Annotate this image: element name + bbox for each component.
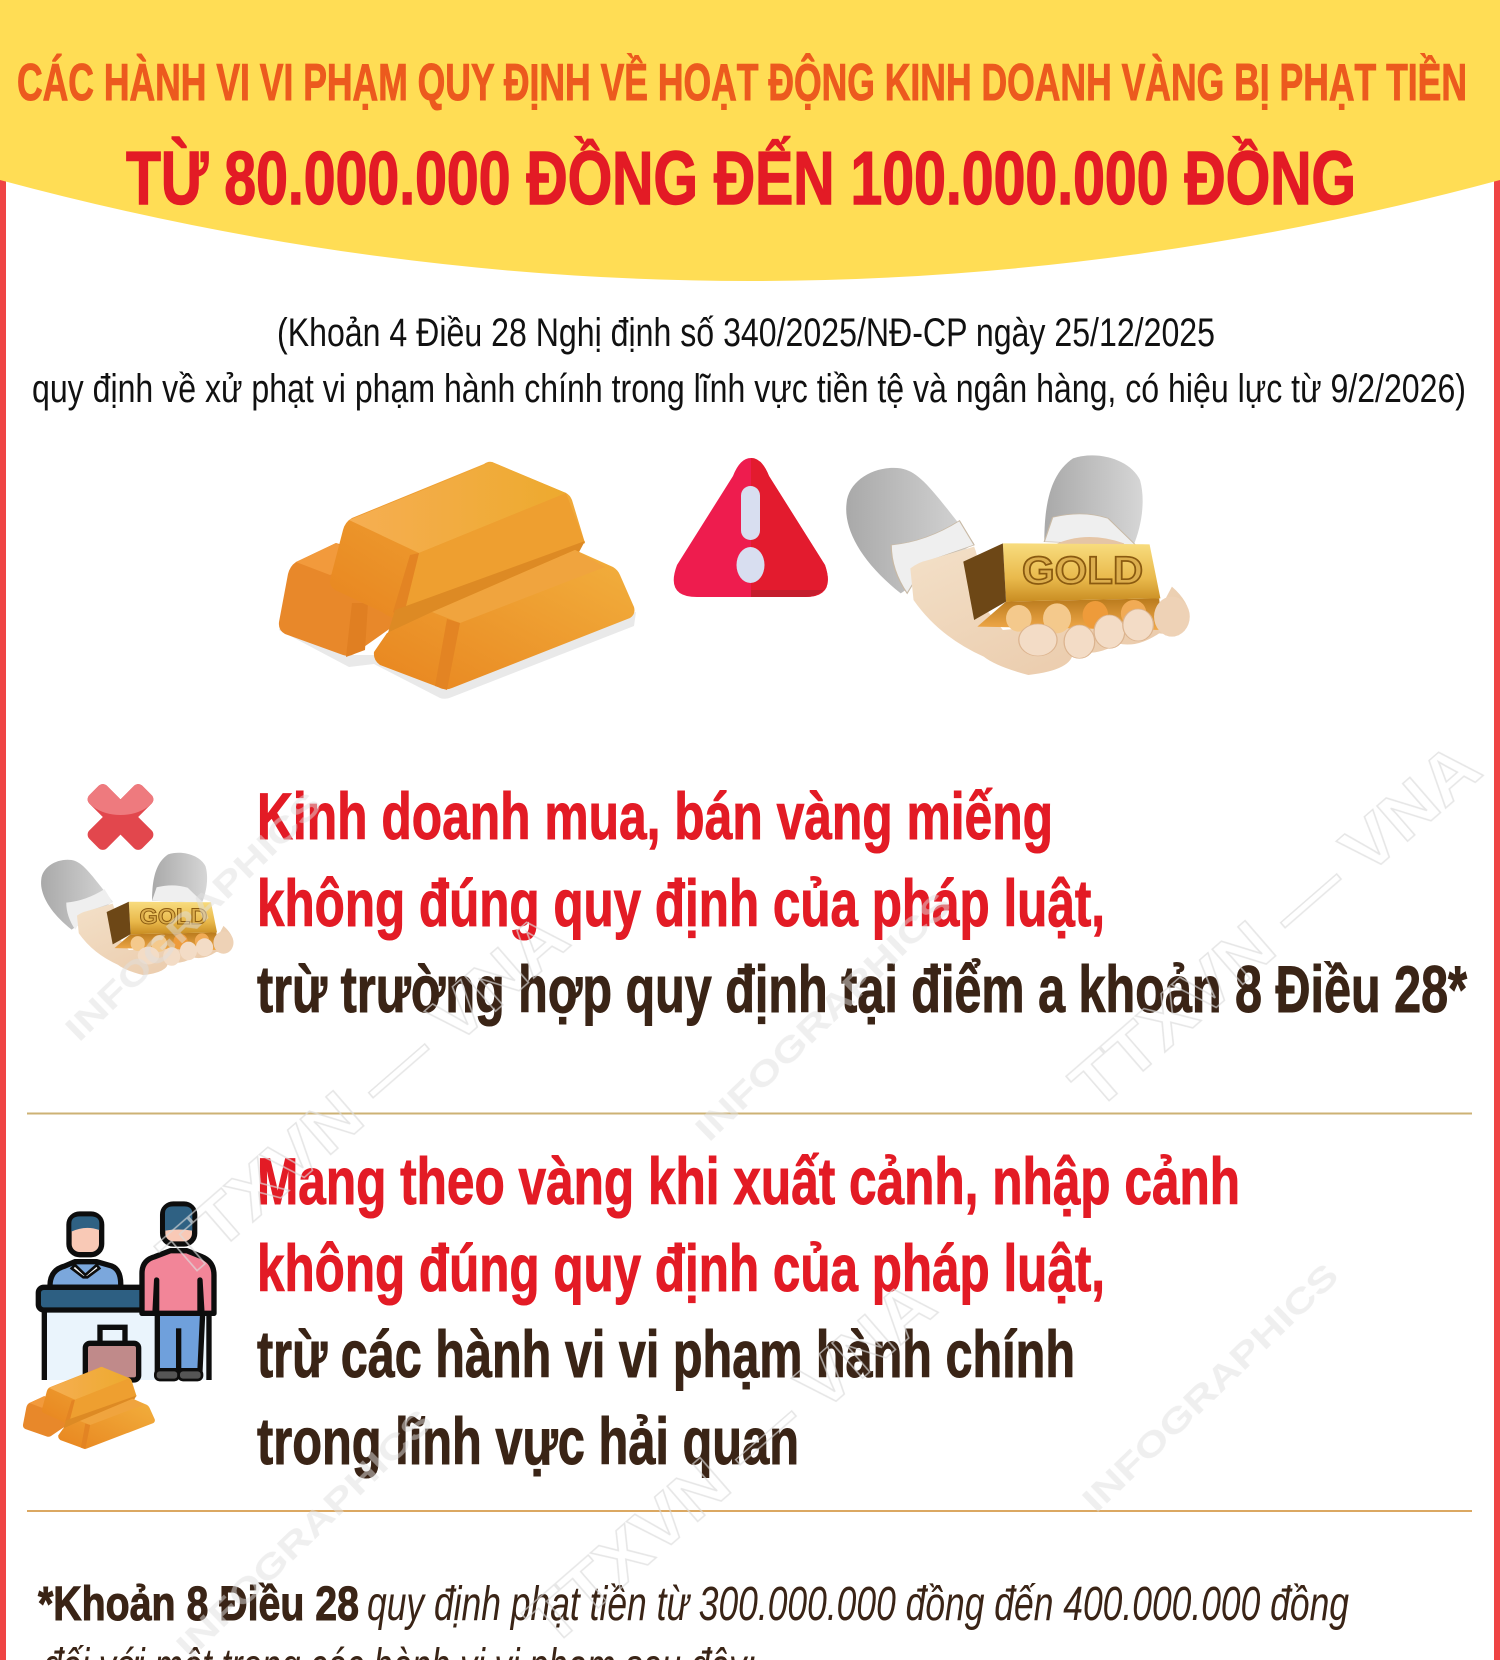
watermark: TTXVN — VNA xyxy=(511,1265,950,1660)
icon: gold bars small xyxy=(23,1367,155,1449)
icon: hands holding gold small: GOLD xyxy=(140,905,207,929)
footnote: *Khoản 8 Điều 28 xyxy=(38,1578,359,1631)
header banner xyxy=(0,0,1500,281)
legal reference text: (Khoản 4 Điều 28 Nghị định số 340/2025/NĐ-CP ngày 25/12/2025 xyxy=(277,311,1215,355)
footnote xyxy=(38,1578,1349,1660)
watermark xyxy=(58,728,1495,1660)
icon: hands holding gold large: GOLD xyxy=(1022,548,1143,592)
row 2: carrying gold across border xyxy=(23,1144,1240,1478)
row 2 text: không đúng quy định của pháp luật, xyxy=(257,1231,1105,1305)
watermark: TTXVN — VNA xyxy=(1056,728,1495,1123)
watermark: TTXVN — VNA xyxy=(144,898,583,1293)
watermark: INFOGRAPHICS xyxy=(58,785,329,1049)
icon: hands holding gold small xyxy=(41,853,233,975)
icon: warning triangle xyxy=(674,458,828,597)
icon: red cross xyxy=(88,784,154,850)
row 1 text: Kinh doanh mua, bán vàng miếng xyxy=(257,779,1053,853)
watermark: INFOGRAPHICS xyxy=(169,1402,440,1660)
legal reference text xyxy=(32,311,1466,411)
row 2 text xyxy=(257,1144,1240,1478)
row 1: gold trading violation xyxy=(41,761,1467,1026)
watermark: INFOGRAPHICS xyxy=(1075,1256,1346,1520)
row 2 text: trong lĩnh vực hải quan xyxy=(257,1404,799,1478)
icon: hands holding gold large xyxy=(846,455,1190,675)
row 1 text xyxy=(257,779,1467,1026)
watermark: INFOGRAPHICS xyxy=(688,885,959,1149)
icon: customs desk with people xyxy=(38,1204,214,1380)
row 1 text: không đúng quy định của pháp luật, xyxy=(257,866,1105,940)
icon: gold bars large xyxy=(279,462,636,699)
row 2 text: trừ các hành vi vi phạm hành chính xyxy=(257,1317,1075,1391)
